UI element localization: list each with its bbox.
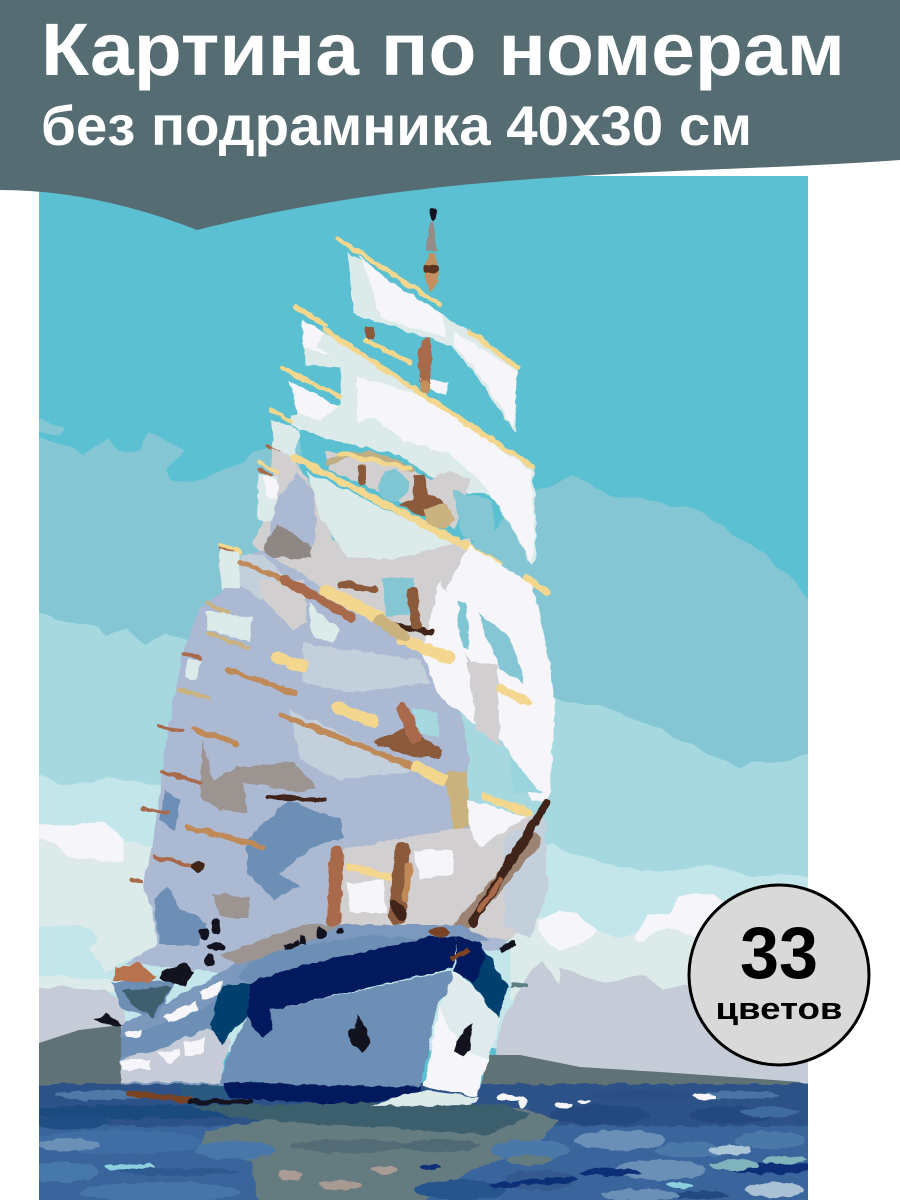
middle sail <box>220 447 547 670</box>
sails <box>126 207 555 975</box>
upper sail <box>337 238 518 432</box>
right billowing sail <box>445 545 555 800</box>
lower sails <box>126 550 548 975</box>
colour count badge: 33 <box>740 913 818 994</box>
sky clouds <box>20 414 830 1100</box>
painting: sailing ship <box>20 176 830 1200</box>
hull <box>94 919 528 1106</box>
sea <box>20 1084 830 1200</box>
subtitle: без подрамника 40х30 см <box>41 94 752 157</box>
header banner <box>0 0 900 230</box>
small left sails <box>268 368 340 472</box>
mast top <box>365 207 439 388</box>
colour count badge: цветов <box>716 991 842 1026</box>
colour count badge <box>689 885 869 1065</box>
hills on horizon <box>39 1026 801 1086</box>
title: Картина по номерам <box>41 8 845 91</box>
ship <box>94 207 555 1106</box>
second sail <box>290 307 537 566</box>
